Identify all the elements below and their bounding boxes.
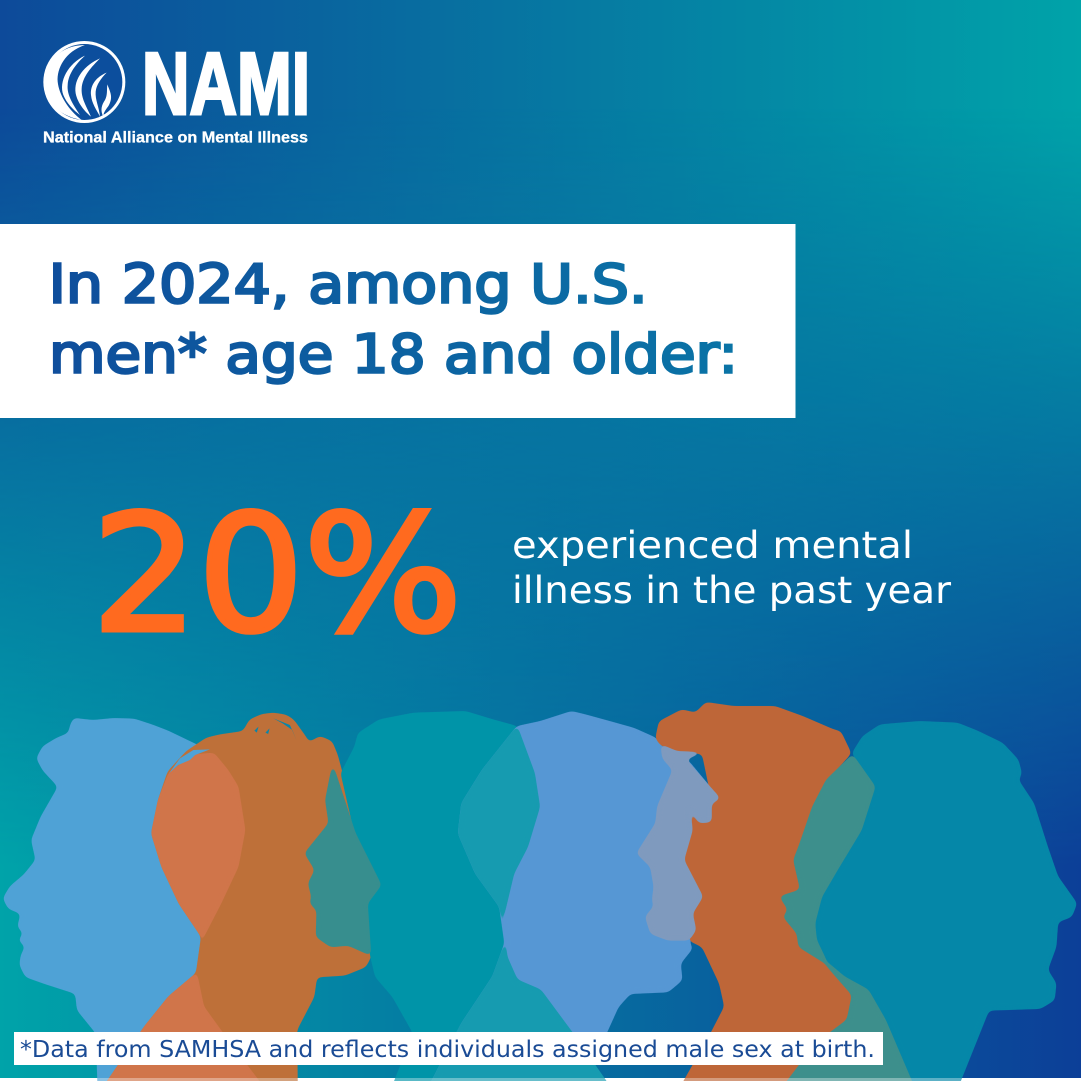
logo wordmark: NAMI [142,34,310,133]
hair gaps in head 2 [169,718,296,773]
statistic description: illness in the past year [512,569,952,612]
head 2 and 3 overlap [305,765,381,955]
head 6: teal [815,722,1076,1081]
heading panel [0,224,796,418]
head 5 and 6 overlap [780,755,915,1081]
icon: NAMI circle emblem [43,41,125,123]
head 4: blue [427,712,720,1081]
heading text: In 2024, among U.S. [49,252,648,316]
statistic description: experienced mental [512,524,913,567]
footnote: *Data from SAMHSA and reflects individuals assigned male sex at birth. [20,1037,875,1063]
head 2 overlap with head 1 [102,753,265,1081]
statistic description [512,524,952,612]
logo tagline: National Alliance on Mental Illness [43,130,308,146]
head 2: orange [102,713,381,1081]
head 5: orange [656,703,852,1081]
head 1: light blue [3,718,265,1081]
statistic: 20%: 20% [92,481,462,668]
head 4 and 5 overlap [637,745,720,940]
head 3 and 4 overlap [427,727,612,1081]
silhouettes of six heads [3,703,1076,1081]
head 3: teal [341,712,612,1081]
heading text [49,252,738,386]
NAMI logo [43,34,310,146]
heading text: men* age 18 and older: [49,322,738,386]
